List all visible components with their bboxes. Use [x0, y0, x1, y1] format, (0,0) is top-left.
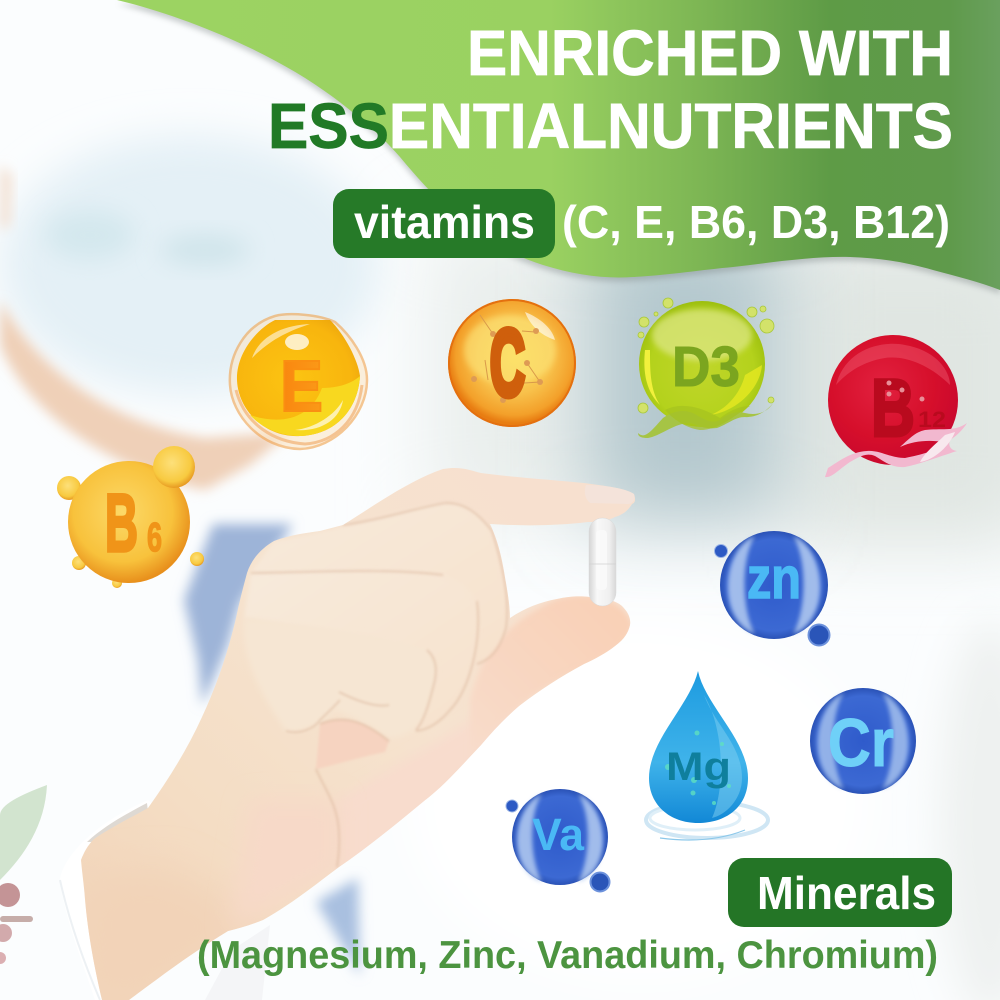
capsule [589, 518, 616, 606]
title: ENRICHED WITH [467, 17, 953, 89]
icon: magnesium drop: Mg [666, 745, 731, 789]
second finger [258, 532, 340, 570]
lower hand tint [230, 800, 340, 930]
palm tint [347, 716, 508, 862]
icon: vitamin E [230, 314, 367, 449]
green curved header shape [117, 0, 1000, 290]
doctor mask [0, 135, 380, 395]
third finger [246, 575, 370, 622]
icon: vitamin D3: D3 [672, 335, 740, 399]
icon: vitamin B12 [825, 335, 967, 477]
vitamins label: vitamins [354, 196, 535, 248]
vitamins label [333, 189, 950, 258]
curled pinky pink underside [316, 720, 389, 769]
icon: vitamin B12: 12 [918, 407, 946, 432]
icon: zinc: zn [747, 546, 801, 611]
icon: magnesium drop [646, 671, 768, 840]
icon: chromium [810, 688, 916, 794]
title [268, 17, 953, 162]
minerals label [728, 858, 952, 927]
icon: vitamin B12: B [871, 363, 915, 454]
hand base [81, 468, 635, 1000]
icon: vitamin C [448, 299, 576, 427]
vitamins label: (C, E, B6, D3, B12) [562, 196, 950, 248]
minerals list: (Magnesium, Zinc, Vanadium, Chromium) [197, 934, 938, 977]
minerals label: Minerals [757, 867, 936, 919]
icon: vitamin B6: B [105, 478, 138, 569]
shadow under green header [117, 4, 1000, 294]
hand shading and fingers [85, 485, 635, 1000]
doctor neck skin [0, 300, 290, 490]
shirt cuff [60, 800, 170, 1000]
icon: vitamin C: C [490, 310, 525, 415]
icon: vanadium: Va [532, 809, 585, 860]
creases [251, 503, 507, 867]
fingernail [585, 485, 635, 504]
icon: vitamin B6 [57, 446, 204, 588]
icon: vitamin E: E [280, 347, 323, 427]
wrist tint [86, 912, 246, 994]
icon: chromium: Cr [828, 705, 894, 781]
thumb [474, 596, 630, 714]
icon: vanadium [506, 789, 610, 892]
icon: vitamin B6: 6 [147, 514, 162, 560]
icon: zinc [714, 531, 830, 646]
background leaf and berries [0, 785, 47, 964]
icon: vitamin D3 [638, 298, 774, 438]
title: ESSENTIALNUTRIENTS [268, 90, 953, 162]
hand holding capsule [60, 468, 635, 1000]
grey right backdrop [426, 258, 598, 484]
fourth finger [262, 681, 306, 728]
tie [184, 524, 293, 706]
